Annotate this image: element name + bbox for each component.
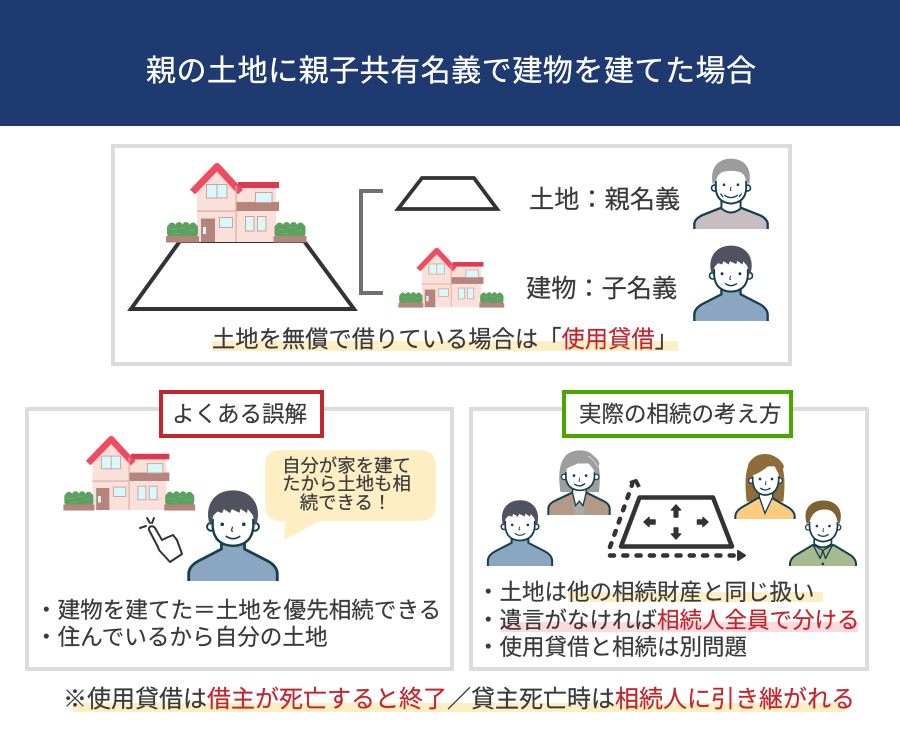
- land division diagram: [610, 481, 745, 560]
- speech bubble: 続できる！: [300, 492, 391, 513]
- title: 親の土地に親子共有名義で建物を建てた場合: [146, 55, 756, 88]
- panel: actual inheritance: [471, 392, 867, 669]
- panel: ownership overview: [113, 146, 790, 364]
- misconception list: ・住んでいるから自分の土地: [35, 625, 328, 650]
- speech bubble: 自分が家を建て: [282, 455, 411, 476]
- highlight: all heirs: [501, 622, 858, 632]
- icon: small house: [398, 250, 504, 308]
- big land trapezoid: [131, 241, 354, 309]
- icon: green shirt man: [790, 500, 856, 570]
- heading: misconception: [161, 392, 322, 436]
- speech bubble: [265, 450, 436, 540]
- heading: actual view: 実際の相続の考え方: [579, 402, 782, 427]
- actual list: ・土地は他の相続財産と同じ扱い: [477, 580, 815, 605]
- misconception list: ・建物を建てた＝土地を優先相続できる: [35, 598, 441, 623]
- bracket: [361, 191, 383, 293]
- speech bubble: たから土地も相: [282, 473, 411, 494]
- heading: actual view: [564, 392, 791, 436]
- highlight: same treatment: [568, 592, 823, 602]
- note: shiyou taishaku: 土地を無償で借りている場合は「使用貸借」: [212, 326, 678, 352]
- icon: grandmother: [548, 450, 610, 519]
- icon: son: [694, 246, 768, 325]
- actual list: ・使用貸借と相続は別問題: [477, 635, 747, 660]
- icon: father: [694, 159, 768, 233]
- actual list: ・遺言がなければ相続人全員で分ける: [477, 608, 860, 633]
- highlight: footer note: [73, 703, 845, 712]
- icon: woman: [735, 454, 795, 523]
- actual list: [477, 580, 860, 660]
- icon: house: [63, 439, 195, 511]
- small land trapezoid: [398, 178, 497, 209]
- misconception list: [35, 598, 441, 650]
- icon: son: [488, 500, 552, 569]
- land owner label: 土地：親名義: [529, 186, 680, 214]
- footer note: ※使用貸借は借主が死亡すると終了／貸主死亡時は相続人に引き継がれる: [63, 686, 855, 713]
- header band: [0, 0, 900, 126]
- heading: misconception: よくある誤解: [172, 402, 307, 427]
- icon: big house: [166, 166, 306, 242]
- building owner label: 建物：子名義: [526, 275, 677, 303]
- icon: man: [189, 490, 277, 586]
- highlight: shiyou taishaku note: [212, 341, 678, 351]
- icon: pointing hand: [140, 518, 182, 562]
- panel: common misconception: [27, 392, 452, 669]
